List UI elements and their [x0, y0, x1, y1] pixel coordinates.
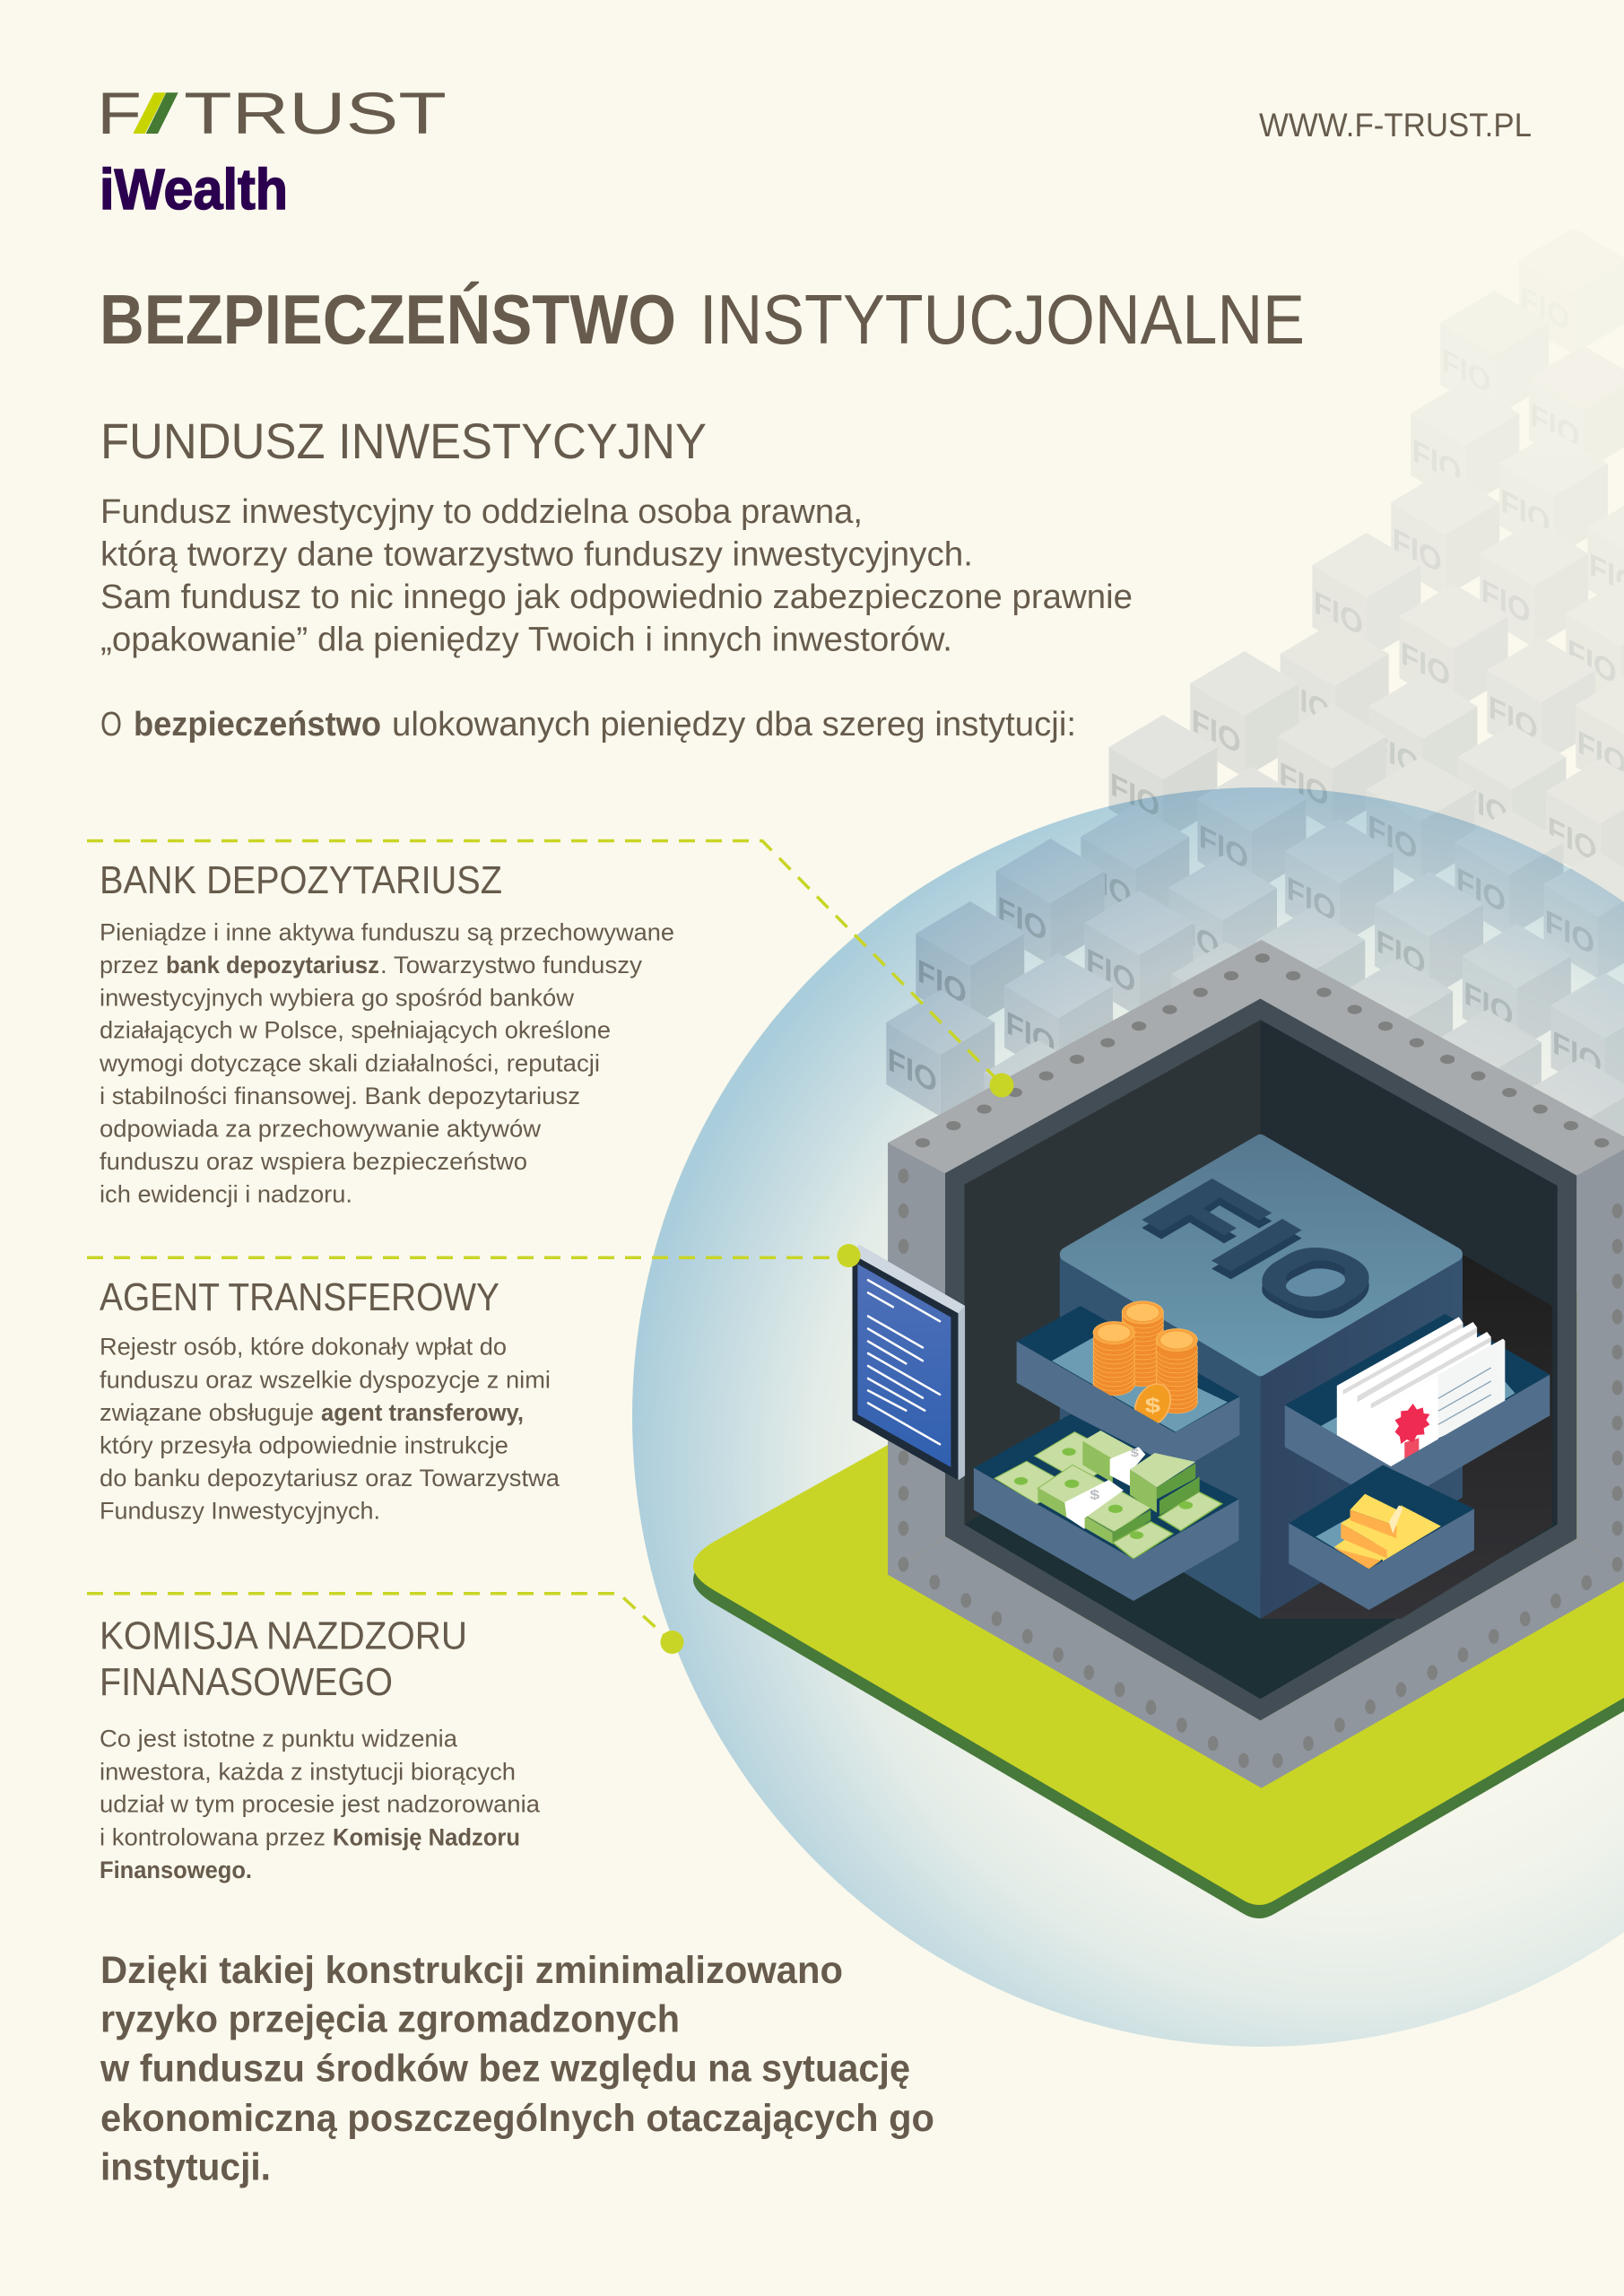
drawers with assets: [974, 1301, 1550, 1610]
conclusion: ryzyko przejęcia zgromadzonych: [100, 1998, 680, 2041]
cube pile: FIO units: FIO: [1370, 724, 1420, 785]
icon: coin stacks: [1093, 1301, 1197, 1413]
cube pile: FIO units: FIO: [1110, 765, 1159, 825]
tablet: text lines: [868, 1280, 940, 1444]
body text: agent transferowy: [100, 1334, 560, 1525]
body text: bank depozytariusz: funduszu oraz wspiera bezpieczeństwo: [100, 1148, 527, 1175]
body text: komisja nadzoru: i kontrolowana przez: [100, 1823, 326, 1850]
cube pile: FIO units: FIO: [1006, 1004, 1055, 1064]
cube pile: FIO units: FIO: [1173, 992, 1222, 1052]
cube pile: FIO units: FIO: [1489, 688, 1538, 748]
cube pile: FIO units: FIO: [1434, 1060, 1483, 1120]
central FIO block: [1060, 1141, 1463, 1619]
body text: komisja nadzoru: Komisję Nadzoru: [333, 1823, 520, 1850]
cube pile: FIO units: [886, 228, 1624, 1185]
intro text: Fundusz inwestycyjny to oddzielna osoba prawna,: [100, 493, 863, 531]
drawer: gold: [1289, 1465, 1474, 1610]
cube pile: FIO units: FIO: [888, 1040, 937, 1100]
cube pile: FIO units: FIO: [1530, 396, 1580, 456]
conclusion: [100, 1950, 934, 2189]
body text: agent transferowy: do banku depozytariusz oraz Towarzystwa: [100, 1465, 560, 1492]
body text: bank depozytariusz: ich ewidencji i nadzoru.: [100, 1181, 352, 1208]
logo: iWealth: iWealth: [100, 157, 288, 222]
conclusion: Dzięki takiej konstrukcji zminimalizowano: [100, 1950, 843, 1992]
cube pile: FIO units: FIO: [997, 889, 1046, 949]
title: [100, 280, 1305, 359]
icon: certificates: [1337, 1317, 1505, 1486]
cube pile: FIO units: FIO: [917, 952, 967, 1012]
icon: banknote bundles: $: [1131, 1448, 1139, 1459]
cube pile: FIO units: FIO: [1314, 583, 1363, 643]
cube pile: FIO units: FIO: [1545, 902, 1594, 962]
icon: standing coin: [1129, 1381, 1176, 1429]
cube pile: FIO units: FIO: [1281, 672, 1331, 732]
conclusion: instytucji.: [100, 2147, 271, 2189]
body text: agent transferowy: związane obsługuje: [100, 1399, 314, 1426]
body text: agent transferowy: agent transferowy,: [321, 1399, 524, 1426]
body text: agent transferowy: Rejestr osób, które dokonały wpłat do: [100, 1334, 507, 1361]
cube pile: FIO units: FIO: [986, 1091, 1035, 1151]
body text: komisja nadzoru: [100, 1726, 541, 1883]
vault: steel frame: [888, 940, 1624, 1788]
cube pile: FIO units: FIO: [1528, 1109, 1577, 1169]
body text: bank depozytariusz: [99, 918, 674, 1208]
cube pile: FIO units: FIO: [1169, 906, 1220, 966]
cube pile: FIO units: FIO: [1368, 807, 1417, 867]
drawer: banknotes: [974, 1414, 1238, 1601]
drawer: coins: [1017, 1301, 1239, 1474]
cube pile: FIO units: FIO: [1552, 1023, 1602, 1083]
cube pile: FIO units: FIO: [1442, 341, 1491, 401]
body text: komisja nadzoru: Co jest istotne z punktu widzenia: [100, 1726, 458, 1752]
translucent sphere: [632, 787, 1624, 2047]
section: agent transferowy: AGENT TRANSFEROWY: [100, 1275, 499, 1319]
intro text: Sam fundusz to nic innego jak odpowiednio zabezpieczone prawnie: [100, 578, 1133, 616]
cube pile: FIO units: FIO: [1086, 941, 1135, 1001]
body text: komisja nadzoru: Finansowego.: [100, 1857, 252, 1883]
title: BEZPIECZEŃSTWO: [100, 280, 676, 359]
body text: bank depozytariusz: przez: [100, 952, 159, 978]
callout line: bank: [87, 841, 1013, 1098]
cube pile: FIO units: FIO: [1481, 571, 1531, 631]
cube pile: FIO units: FIO: [1456, 860, 1506, 920]
icon: gold bars: [1334, 1494, 1441, 1569]
body text: bank depozytariusz: wymogi dotyczące skali działalności, reputacji: [99, 1049, 600, 1076]
intro text: którą tworzy dane towarzystwo funduszy inwestycyjnych.: [100, 536, 973, 574]
body text: komisja nadzoru: udział w tym procesie jest nadzorowania: [100, 1791, 541, 1818]
body text: bank depozytariusz: inwestycyjnych wybiera go spośród banków: [100, 984, 574, 1011]
cube pile: FIO units: FIO: [1393, 520, 1442, 580]
cube pile: FIO units: FIO: [1521, 278, 1569, 338]
cube pile: FIO units: FIO: [1568, 631, 1617, 691]
cube pile: FIO units: FIO: [1412, 431, 1462, 491]
section: bank depozytariusz: [99, 858, 674, 1208]
logo: F/TRUST: TRUST: [184, 80, 447, 146]
body text: bank depozytariusz: Pieniądze i inne aktywa funduszu są przechowywane: [100, 918, 674, 945]
cube pile: FIO units: FIO: [1258, 958, 1307, 1018]
icon: standing coin: $: [1145, 1394, 1160, 1417]
drawer: documents: [1285, 1314, 1550, 1508]
icon: banknote bundles: [994, 1431, 1222, 1559]
callout line: agent: [87, 1244, 861, 1267]
section: komisja nadzoru: KOMISJA NAZDZORU: [100, 1613, 467, 1657]
intro text: [100, 493, 1133, 744]
body text: bank depozytariusz: działających w Polsce, spełniających określone: [100, 1017, 611, 1044]
title: INSTYTUCJONALNE: [699, 280, 1305, 359]
vault: interior walls and floor: [964, 1020, 1558, 1699]
cube pile: FIO units: FIO: [1548, 809, 1597, 869]
body text: bank depozytariusz: odpowiada za przechowywanie aktywów: [100, 1116, 542, 1143]
tablet: [853, 1245, 965, 1481]
body text: komisja nadzoru: inwestora, każda z instytucji biorących: [100, 1758, 516, 1785]
conclusion: ekonomiczną poszczególnych otaczających go: [100, 2098, 934, 2140]
cube pile: FIO units: FIO: [1401, 634, 1450, 694]
cube pile: FIO units: FIO: [1376, 922, 1426, 982]
cube pile: FIO units: FIO: [1082, 855, 1132, 915]
green base plate: [693, 1238, 1624, 1918]
logo: F/TRUST: F: [97, 80, 142, 146]
intro text: „opakowanie” dla pieniędzy Twoich i innych inwestorów.: [100, 621, 952, 658]
vault: [888, 940, 1624, 1788]
cube pile: FIO units: FIO: [1459, 775, 1508, 835]
body text: bank depozytariusz: . Towarzystwo funduszy: [380, 952, 643, 978]
callout line: komisja: [87, 1594, 683, 1654]
intro text: ulokowanych pieniędzy dba szereg instytucji:: [392, 706, 1076, 744]
body text: agent transferowy: który przesyła odpowiednie instrukcje: [100, 1432, 508, 1459]
cube pile: FIO units: FIO: [1346, 1009, 1395, 1069]
section: agent transferowy: [100, 1275, 560, 1525]
FIO letters on block: [1142, 1178, 1369, 1318]
cube pile: FIO units: FIO: [1199, 817, 1248, 877]
body text: bank depozytariusz: bank depozytariusz: [166, 952, 379, 978]
vault: rivets: [899, 953, 1622, 1768]
heading: fundusz inwestycyjny: FUNDUSZ INWESTYCYJNY: [100, 413, 707, 469]
body text: agent transferowy: Funduszy Inwestycyjnych.: [100, 1498, 380, 1525]
cube pile: FIO units: FIO: [1463, 974, 1513, 1034]
cube pile: FIO units: FIO: [1501, 482, 1550, 542]
section: komisja nadzoru: [100, 1613, 541, 1883]
icon: banknote bundles: $: [1090, 1487, 1100, 1502]
body text: bank depozytariusz: i stabilności finansowej. Bank depozytariusz: [100, 1083, 580, 1109]
website address: WWW.F-TRUST.PL: [1259, 107, 1532, 144]
cube pile: FIO units: FIO: [1192, 701, 1241, 761]
cube pile: FIO units: FIO: [1287, 869, 1336, 929]
intro text: O: [100, 706, 122, 744]
intro text: bezpieczeństwo: [134, 706, 381, 744]
cube pile: FIO units: FIO: [1279, 754, 1328, 814]
conclusion: w funduszu środków bez względu na sytuację: [100, 2048, 910, 2091]
section: komisja nadzoru: FINANASOWEGO: [100, 1660, 393, 1704]
logo: F/TRUST: [97, 80, 447, 146]
section: bank depozytariusz: BANK DEPOZYTARIUSZ: [100, 858, 502, 902]
body text: agent transferowy: funduszu oraz wszelkie dyspozycje z nimi: [100, 1366, 551, 1393]
